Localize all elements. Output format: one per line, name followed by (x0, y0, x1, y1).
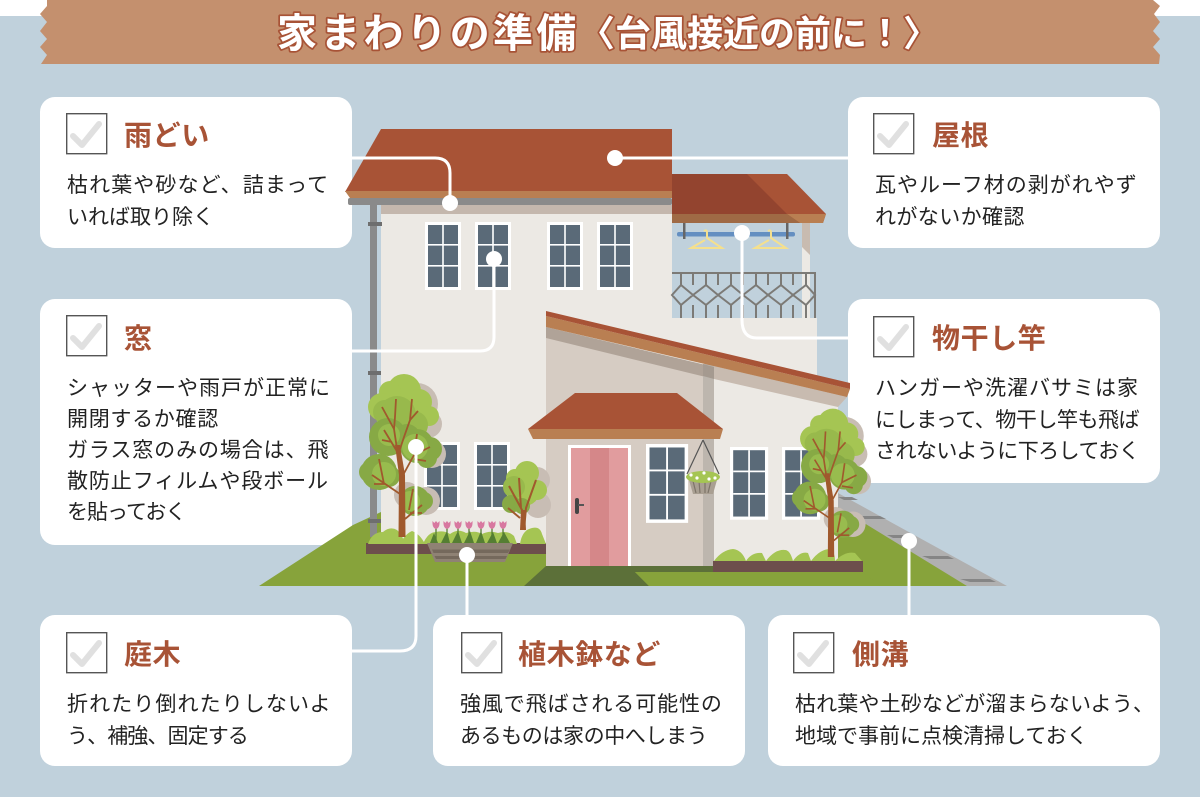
panel: 雨どい (40, 97, 352, 248)
connector: 植木鉢 (459, 547, 475, 615)
panel: 雨どい: いれば取り除く (67, 206, 214, 229)
tree: large left (359, 374, 446, 537)
panel: 雨どい: 枯れ葉や砂など、詰まって (67, 174, 329, 197)
panel: 植木鉢など (433, 615, 745, 766)
connector: 物干し竿 (734, 225, 848, 338)
tree: small left (502, 461, 551, 530)
planter with tulips (423, 521, 517, 562)
downspout (368, 205, 382, 537)
panel: 窓: ガラス窓のみの場合は、飛 (67, 439, 329, 462)
connector: 側溝 (901, 533, 917, 615)
panel: 側溝: 地域で事前に点検清掃しておく (795, 725, 1088, 748)
panel: 側溝: 枯れ葉や土砂などが溜まらないよう、 (795, 693, 1154, 716)
main roof (345, 129, 672, 205)
panel: 雨どい: 雨どい (124, 120, 210, 151)
title text: 台風接近の前に！ (615, 13, 903, 54)
balcony railing (672, 273, 815, 318)
panel: 植木鉢など: 植木鉢など (518, 639, 661, 670)
panel: 植木鉢など: 強風で飛ばされる可能性の (460, 693, 723, 716)
title text: 〉 (903, 13, 939, 54)
porch roof (528, 393, 723, 439)
upper windows (425, 222, 633, 290)
lower wing (546, 311, 850, 566)
lower windows (424, 442, 820, 523)
panel: 屋根: れがないか確認 (875, 206, 1025, 229)
connector: 雨どい (352, 158, 458, 211)
panel: 窓: 散防止フィルムや段ボール (67, 470, 329, 493)
panel: 物干し竿: にしまって、物干し竿も飛ば (875, 409, 1140, 432)
title text (277, 12, 939, 56)
connector: 庭木 (352, 439, 424, 651)
panel: 窓 (40, 299, 352, 545)
panel: 庭木: う、補強、固定する (67, 725, 248, 748)
panel: 屋根: 瓦やルーフ材の剥がれやず (875, 174, 1138, 197)
front path (524, 566, 880, 586)
title text: 家まわりの準備 (277, 12, 579, 56)
house illustration (259, 129, 1007, 586)
connector: 屋根 (607, 150, 848, 166)
panel: 庭木: 庭木 (124, 639, 181, 670)
balcony posts (802, 223, 810, 318)
connector: 窓 (352, 251, 502, 351)
tree: right (792, 409, 871, 557)
panel: 窓: 窓 (124, 323, 153, 354)
main wall (381, 205, 817, 545)
panel: 植木鉢など: あるものは家の中へしまう (460, 725, 707, 748)
panel: 窓: シャッターや雨戸が正常に (67, 377, 331, 400)
panel: 窓: 開閉するか確認 (67, 408, 219, 431)
panel: 屋根: 屋根 (932, 120, 989, 151)
panel: 側溝: 側溝 (852, 639, 909, 670)
panel: 庭木: 折れたり倒れたりしないよ (67, 693, 332, 716)
hanging basket (686, 440, 720, 494)
panel: 庭木 (40, 615, 352, 766)
balcony roof (672, 174, 826, 223)
panel: 屋根 (848, 97, 1160, 248)
title text: 〈 (579, 13, 615, 54)
panel: 物干し竿 (848, 299, 1160, 483)
title banner (40, 0, 1160, 64)
panel: 物干し竿: ハンガーや洗濯バサミは家 (875, 377, 1139, 400)
panel: 窓: を貼っておく (67, 501, 185, 524)
panel: 物干し竿: されないように下ろしておく (875, 440, 1139, 463)
panel: 物干し竿: 物干し竿 (932, 323, 1046, 354)
panel: 側溝 (768, 615, 1160, 766)
door (568, 445, 631, 566)
garden beds (366, 528, 863, 572)
ground (259, 493, 1007, 586)
laundry pole and hangers (677, 223, 795, 248)
